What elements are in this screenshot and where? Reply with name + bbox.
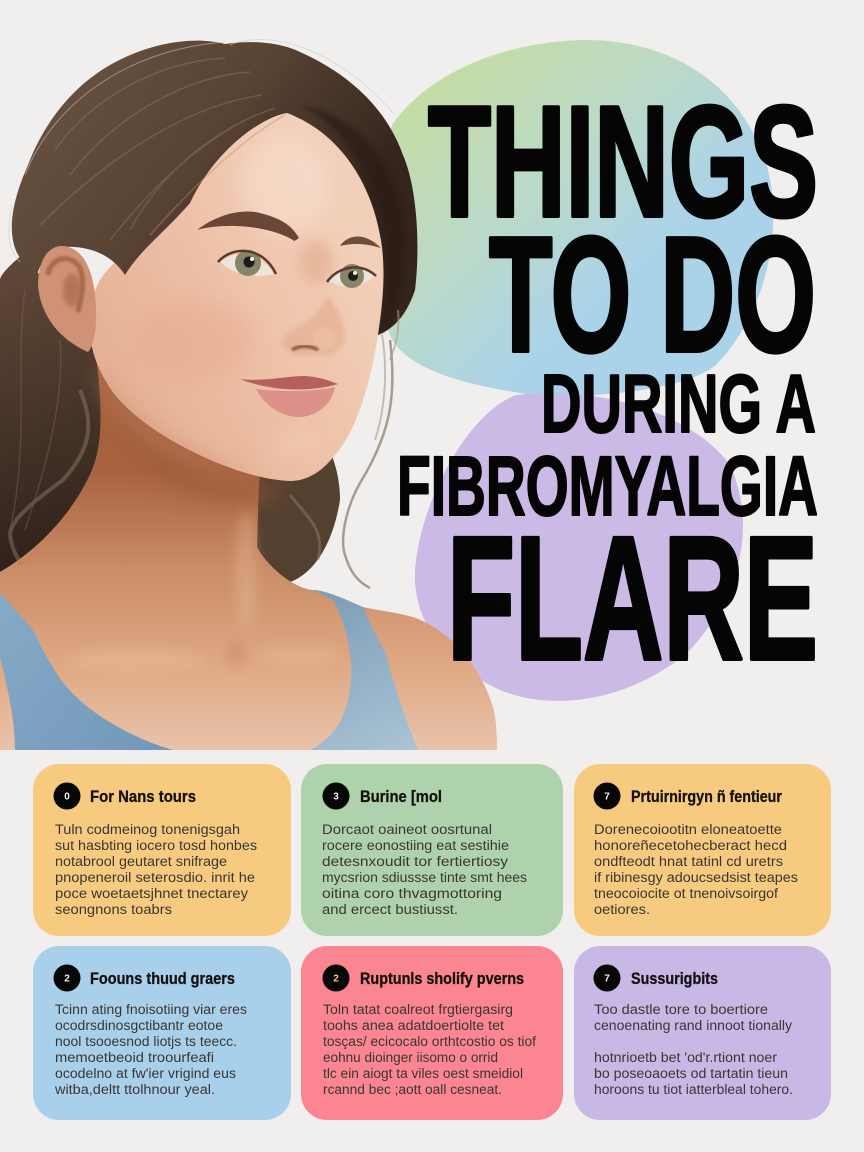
decorative blob: purple	[415, 393, 743, 701]
panel: card 1: sut hasbting iocero tosd honbes	[55, 838, 257, 853]
panel: card 2: rocere eonostiing eat sestihie	[322, 838, 509, 853]
panel: card 4: witba,deltt ttolhnour yeal.	[54, 1082, 215, 1097]
decorative blob: green-blue	[382, 40, 773, 396]
lips	[240, 376, 338, 417]
shoulders and neck	[0, 350, 497, 750]
panel: card 2: Dorcaot oaineot oosrtunal	[322, 822, 492, 837]
hair behind neck	[257, 445, 340, 582]
panel: card 1: pnopeneroil seterosdio. inrit he	[55, 870, 255, 885]
panel: card 1: For Nans tours	[90, 787, 196, 806]
panel: card 4: Tcinn ating fnoisotiing viar eres	[55, 1002, 247, 1017]
panel: card 5: Toln tatat coalreot frgtiergasirg	[323, 1002, 513, 1017]
title	[397, 74, 818, 697]
panel: card 1	[33, 764, 291, 936]
panel: card 6: 7	[604, 974, 610, 984]
panel: card 3: Dorenecoiootitn eloneatoette	[594, 822, 782, 837]
panel: card 3: honoreñecetohecberact hecd	[594, 838, 787, 853]
panel: card 2: Burine [mol	[360, 787, 442, 806]
panel: card 3: 7	[604, 792, 610, 802]
tank top	[0, 590, 418, 750]
panel: card 2: and ercect bustiusst.	[322, 902, 458, 917]
panel: card 1: 0	[64, 792, 70, 802]
panel: card 4	[33, 946, 291, 1120]
panel: card 6: hotnrioetb bet 'od'r.rtiont noer	[594, 1050, 778, 1065]
panel: card 1: Tuln codmeinog tonenigsgah	[55, 822, 240, 837]
panel: card 1: poce woetaetsjhnet tnectarey	[55, 886, 248, 901]
panel: card 2	[301, 764, 563, 936]
ear	[38, 246, 96, 352]
chin highlight	[267, 433, 323, 457]
panel: card 5: tosças/ ecicocalo orthtcostio os tiof	[323, 1034, 536, 1049]
ponytail hair	[0, 255, 108, 572]
neck shadow	[208, 477, 282, 510]
flyaway hairs	[9, 39, 422, 310]
panel: card 3: ondfteodt hnat tatinl cd uretrs	[594, 854, 783, 869]
panel: card 1: seongnons toabrs	[55, 902, 172, 917]
eye socket warmth	[300, 240, 332, 284]
panel: card 5: 2	[333, 974, 339, 984]
panel: card 5: tlc ein aiogt ta viles oest smeidiol	[323, 1066, 523, 1081]
panel: card 5: eohnu dioinger iisomo o orrid	[323, 1050, 498, 1065]
hair shadow right	[305, 106, 388, 336]
panel: card 6: Sussurigbits	[631, 969, 718, 988]
panel: card 2: oitina coro thvagmottoring	[322, 886, 502, 901]
forehead highlight	[240, 138, 325, 234]
panel: card 6	[574, 946, 831, 1120]
right eyebrow	[340, 236, 381, 248]
panel: card 2: detesnxoudit tor fertiertiosy	[322, 854, 508, 869]
collarbone highlights	[78, 646, 327, 667]
hair strands	[10, 58, 320, 565]
panel: card 4: nool tsooesnod liotjs ts teecc.	[55, 1034, 237, 1049]
panel: card 3: Prtuirnirgyn ñ fentieur	[631, 787, 782, 806]
face	[89, 113, 384, 481]
panel: card 4: 2	[64, 974, 70, 984]
left eyebrow	[197, 212, 299, 241]
panel: card 6: Too dastle tore to boertiore	[594, 1002, 768, 1017]
nose	[281, 295, 345, 356]
panel: card 3: if ribinesgy adoucsedsist teapes	[594, 870, 798, 885]
left eye	[218, 250, 276, 276]
panel: card 3: tneocoiocite ot tnenoivsoirgof	[594, 886, 778, 901]
jaw shadow	[90, 368, 232, 470]
cheek blush	[168, 310, 245, 366]
panel: card 6: horoons tu tiot iatterbleal tohero.	[594, 1082, 793, 1097]
panel: card 6: bo poseoaoets od tartatin tieun	[594, 1066, 788, 1081]
panel: card 3	[574, 764, 831, 936]
panel: card 3: oetiores.	[594, 902, 650, 917]
panel: card 1: notabrool geutaret snifrage	[55, 854, 227, 869]
panel: card 4: memoetbeoid troourfeafi	[55, 1050, 214, 1065]
neck highlight	[236, 510, 256, 630]
panel: card 5: rcannd bec ;aott oall cesneat.	[323, 1082, 502, 1097]
panel: card 6: cenoenating rand innoot tionally	[594, 1018, 792, 1033]
hair crown	[12, 41, 417, 335]
panel: card 2: 3	[333, 792, 339, 802]
portrait illustration	[0, 39, 497, 750]
wispy hair strands	[343, 310, 399, 588]
panel: card 4: Foouns thuud graers	[90, 969, 235, 988]
panel: card 5: toohs anea adatdoertiolte tet	[323, 1018, 504, 1033]
right eye	[327, 264, 376, 288]
panel: card 4: ocodrsdinosgctibantr eotoe	[55, 1018, 223, 1033]
panel: card 4: ocodelno at fw'ier vrigind eus	[55, 1066, 236, 1081]
panel: card 2: mycsrion sdiussse tinte smt hees	[322, 870, 527, 885]
panel: card 5: Ruptunls sholify pverns	[360, 969, 524, 988]
panel: card 5	[301, 946, 563, 1120]
